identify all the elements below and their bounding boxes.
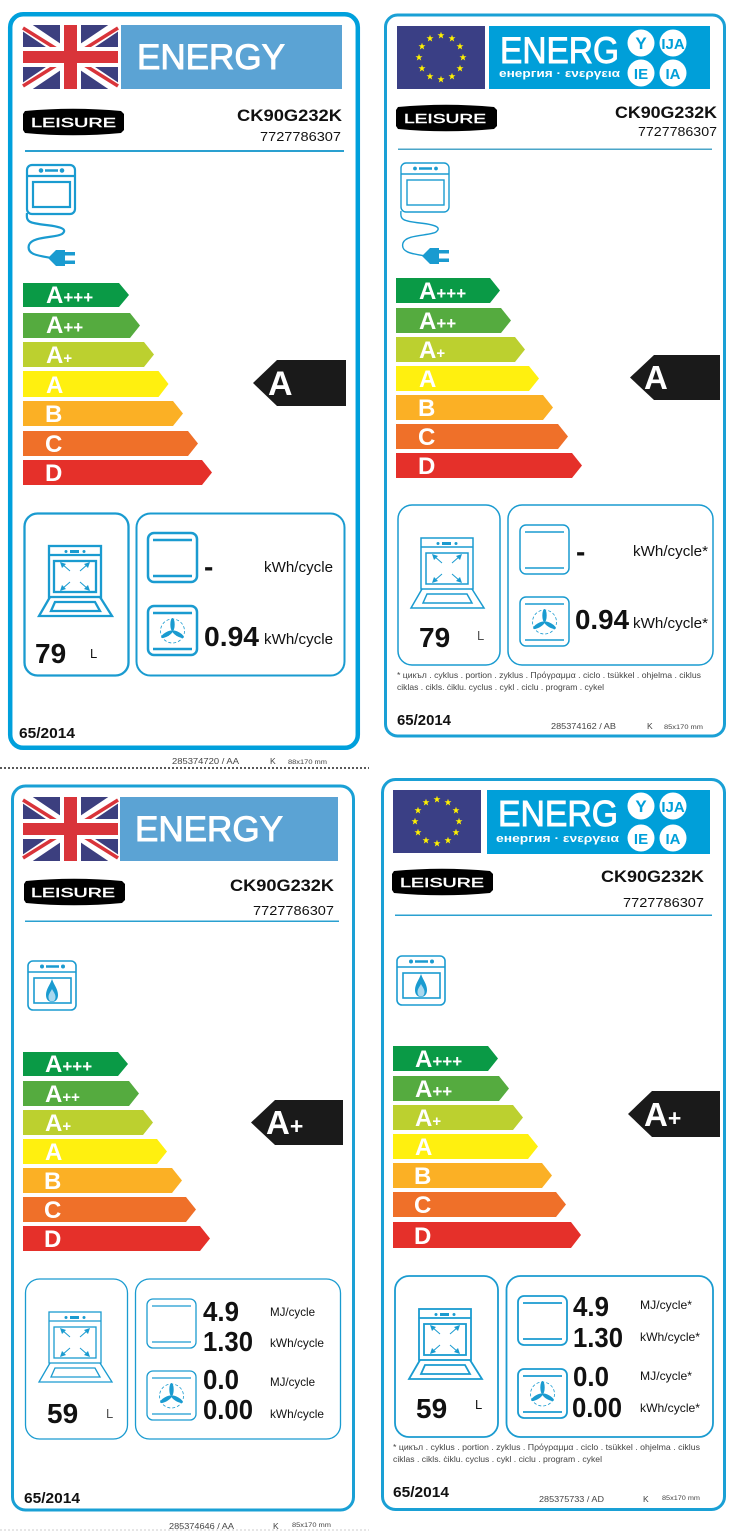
energy scale: B	[414, 1163, 431, 1190]
heading band: ENERGY	[120, 797, 338, 861]
energy scale: D	[44, 1226, 61, 1253]
energy scale: A++	[46, 312, 83, 339]
rating arrow: A	[253, 360, 346, 406]
panel: energy consumption: kWh/cycle	[264, 559, 333, 576]
rating arrow: A	[630, 355, 720, 400]
panel: volume: 79	[35, 638, 66, 669]
energy scale: B	[44, 1168, 61, 1195]
panel: volume	[26, 1279, 128, 1439]
panel border	[12, 786, 354, 1510]
energy scale: A+++	[46, 282, 93, 309]
icon: gas oven	[28, 961, 76, 1010]
print code: K	[643, 1494, 649, 1504]
heading band: ENERG	[487, 790, 710, 854]
print code: 85x170 mm	[662, 1495, 700, 1502]
heading band: ENERG: IA	[666, 66, 681, 83]
energy label: EU gas oven	[382, 780, 724, 1510]
brand logo	[396, 105, 497, 131]
heading band: ENERG: IA	[666, 831, 681, 848]
energy scale: D	[418, 453, 435, 480]
icon: electric oven with plug	[27, 165, 75, 266]
panel: energy consumption: 1.30	[203, 1326, 253, 1357]
energy scale: A	[419, 366, 436, 393]
energy scale: A+	[45, 1110, 71, 1137]
panel: energy consumption: kWh/cycle*	[640, 1401, 700, 1415]
energy scale: B	[45, 401, 62, 428]
rating arrow: A+	[251, 1100, 343, 1145]
rating arrow: A: A	[268, 365, 293, 403]
heading band: ENERG: ENERG	[500, 30, 619, 71]
energy scale: B	[418, 395, 435, 422]
regulation number: 65/2014	[397, 712, 452, 729]
print code: K	[270, 756, 276, 766]
energy scale: A+++	[419, 278, 466, 305]
rating arrow: A: A	[644, 359, 668, 396]
panel: energy consumption: 0.0	[573, 1361, 609, 1392]
panel: energy consumption	[136, 514, 344, 676]
model name: CK90G232K	[230, 876, 335, 895]
panel: volume: L	[106, 1406, 113, 1421]
print code: 285374646 / AA	[169, 1521, 234, 1531]
print code: 85x170 mm	[292, 1522, 331, 1529]
panel: energy consumption: 0.00	[572, 1392, 622, 1423]
panel: volume: L	[477, 628, 484, 643]
footnote	[393, 1442, 700, 1464]
energy scale: A++	[415, 1076, 452, 1103]
model number: 7727786307	[623, 895, 704, 910]
energy scale: D	[414, 1223, 431, 1250]
energy scale: D	[45, 460, 62, 487]
icon: UK flag	[23, 797, 118, 861]
panel: energy consumption: MJ/cycle	[270, 1305, 315, 1319]
heading band: ENERGY: ENERGY	[137, 38, 285, 77]
energy label: UK gas oven	[12, 786, 354, 1510]
model number: 7727786307	[253, 903, 334, 918]
panel: energy consumption: -	[576, 536, 585, 567]
energy scale	[23, 1051, 210, 1253]
heading band: ENERGY: ENERGY	[135, 810, 283, 849]
panel: energy consumption: 0.94	[204, 621, 259, 652]
energy scale: A	[45, 1139, 62, 1166]
energy scale: C	[414, 1192, 431, 1219]
panel: energy consumption: kWh/cycle*	[640, 1330, 700, 1344]
panel: energy consumption: MJ/cycle*	[640, 1369, 692, 1383]
heading band: ENERGY	[121, 25, 342, 89]
panel: energy consumption: kWh/cycle	[270, 1407, 324, 1421]
energy scale: C	[418, 424, 435, 451]
energy scale: A	[46, 372, 63, 399]
panel border	[382, 780, 724, 1510]
icon: electric oven with plug	[401, 163, 449, 264]
model name: CK90G232K	[615, 103, 718, 122]
energy scale: A	[415, 1134, 432, 1161]
heading band: ENERG: ENERG	[498, 793, 618, 834]
panel: energy consumption	[136, 1279, 340, 1439]
heading band: ENERG: IE	[634, 66, 648, 83]
icon: EU flag	[397, 26, 485, 89]
brand logo	[23, 109, 124, 135]
panel: energy consumption: 4.9	[203, 1296, 239, 1327]
footnote: * цикъл . cyklus . portion . zyklus . Πρόγραμμα . ciclo . tsükkel . ohjelma . ciklus	[393, 1442, 700, 1452]
model name: CK90G232K	[601, 867, 705, 886]
footnote: ciklas . cikls. ċiklu. cyclus . cykl . ciclu . program . cykel	[393, 1454, 602, 1464]
panel: volume: 79	[419, 622, 450, 653]
panel: volume: 59	[416, 1393, 447, 1424]
regulation number: 65/2014	[24, 1490, 81, 1507]
brand logo: LEISURE	[31, 115, 116, 130]
regulation number: 65/2014	[393, 1484, 450, 1501]
model number: 7727786307	[260, 129, 341, 144]
panel: volume	[24, 514, 128, 676]
panel: energy consumption: kWh/cycle*	[633, 615, 708, 632]
energy label: UK electric oven	[10, 14, 358, 748]
panel: energy consumption: 0.0	[203, 1364, 239, 1395]
heading band: ENERG: енергия · ενεργεια	[499, 68, 620, 80]
heading band: ENERG: IE	[634, 831, 648, 848]
print code: K	[273, 1521, 279, 1531]
brand logo	[392, 869, 493, 895]
panel: energy consumption: 1.30	[573, 1322, 623, 1353]
print code: 88x170 mm	[288, 759, 327, 766]
icon: EU flag	[393, 790, 481, 853]
footnote: ciklas . cikls. ċiklu. cyclus . cykl . ciclu . program . cykel	[397, 682, 604, 692]
panel: energy consumption: MJ/cycle	[270, 1375, 315, 1389]
panel: energy consumption: kWh/cycle	[264, 631, 333, 648]
print code: 285374720 / AA	[172, 756, 239, 766]
brand logo: LEISURE	[404, 111, 486, 126]
print code: 85x170 mm	[664, 724, 703, 731]
heading band: ENERG: IJA	[661, 799, 685, 816]
print code	[539, 1494, 700, 1504]
heading band: ENERG: IJA	[661, 36, 685, 53]
regulation number: 65/2014	[19, 725, 76, 742]
panel: energy consumption	[506, 1276, 713, 1437]
energy scale: A+++	[45, 1051, 92, 1078]
print code	[169, 1521, 331, 1531]
print code: 285375733 / AD	[539, 1494, 604, 1504]
panel: energy consumption: MJ/cycle*	[640, 1298, 692, 1312]
energy scale: A+	[46, 342, 72, 369]
panel: energy consumption: kWh/cycle*	[633, 543, 708, 560]
energy scale	[393, 1046, 581, 1250]
heading band: ENERG: Y	[635, 797, 647, 816]
panel: energy consumption	[508, 505, 713, 665]
panel border	[10, 14, 358, 748]
energy label: EU electric oven	[386, 15, 724, 736]
rating arrow: A+: A+	[644, 1096, 681, 1133]
panel: volume	[395, 1276, 498, 1437]
brand logo: LEISURE	[31, 885, 115, 900]
panel: volume: 59	[47, 1398, 78, 1429]
print code: K	[647, 721, 653, 731]
print code: 285374162 / AB	[551, 721, 616, 731]
print code	[172, 756, 327, 766]
energy scale	[23, 282, 212, 487]
model name: CK90G232K	[237, 106, 343, 125]
icon: UK flag	[23, 25, 118, 89]
icon: gas oven	[397, 956, 445, 1005]
panel border	[386, 15, 724, 736]
brand logo	[24, 879, 125, 905]
energy scale: A+	[415, 1105, 441, 1132]
rating arrow: A+	[628, 1091, 720, 1137]
energy scale: A+	[419, 337, 445, 364]
rating arrow: A+: A+	[266, 1104, 303, 1141]
panel: volume: L	[475, 1397, 482, 1412]
panel: energy consumption: kWh/cycle	[270, 1336, 324, 1350]
energy scale	[396, 278, 582, 480]
energy scale: A++	[45, 1081, 80, 1108]
footnote: * цикъл . cyklus . portion . zyklus . Πρόγραμμα . ciclo . tsükkel . ohjelma . ciklus	[397, 670, 701, 680]
panel: energy consumption: -	[204, 551, 213, 582]
energy scale: A++	[419, 308, 456, 335]
panel: volume	[398, 505, 500, 665]
heading band: ENERG	[489, 26, 710, 89]
footnote	[397, 670, 701, 692]
heading band: ENERG: Y	[635, 34, 647, 53]
panel: energy consumption: 4.9	[573, 1291, 609, 1322]
panel: energy consumption: 0.00	[203, 1394, 253, 1425]
heading band: ENERG: енергия · ενεργεια	[496, 833, 619, 845]
print code	[551, 721, 703, 731]
energy scale: C	[45, 431, 62, 458]
model number: 7727786307	[638, 124, 717, 139]
brand logo: LEISURE	[400, 875, 484, 890]
energy scale: C	[44, 1197, 61, 1224]
panel: volume: L	[90, 646, 97, 661]
panel: energy consumption: 0.94	[575, 604, 629, 635]
energy scale: A+++	[415, 1046, 462, 1073]
